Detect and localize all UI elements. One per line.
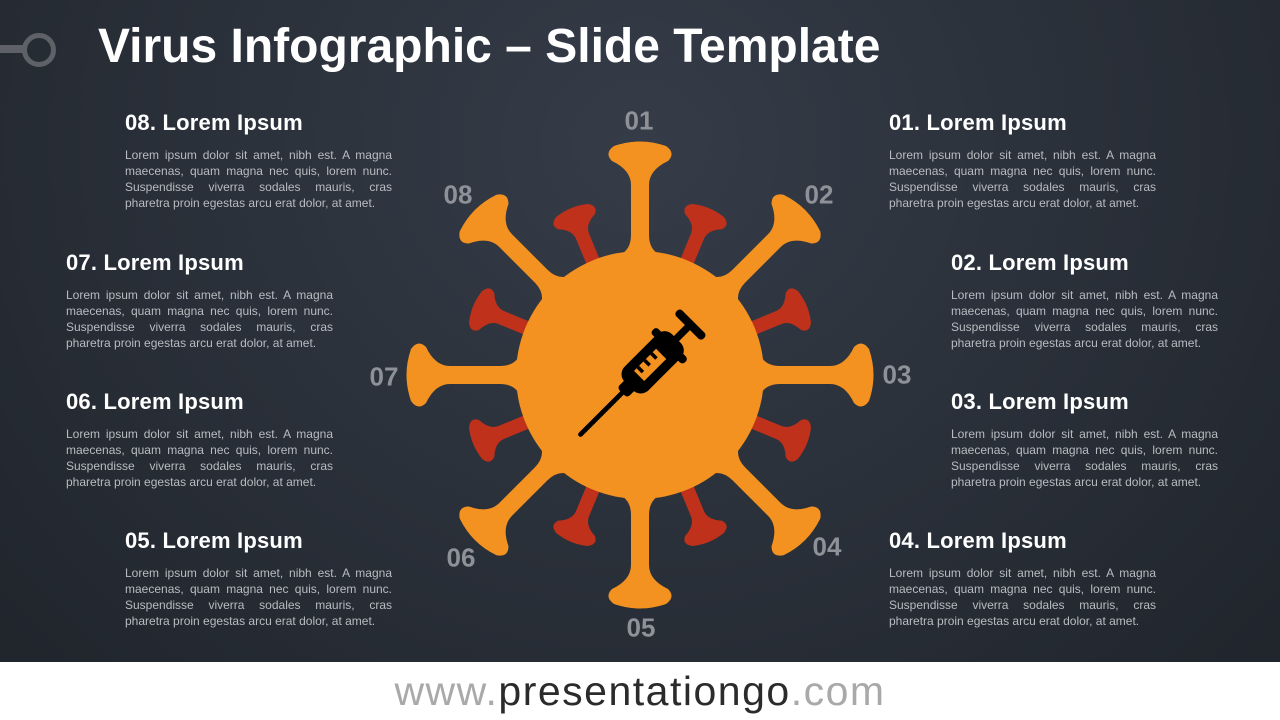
text block 01: 01. Lorem Ipsum [889,110,1067,135]
text block 02 [951,250,1218,350]
text block 06 [66,389,334,489]
text: 06 [447,542,475,572]
text block 05: Lorem ipsum dolor sit amet, nibh est. A magna maecenas, quam magna nec quis, lorem nunc. Suspendisse viverra sodales mauris, cras pharetra proin egestas arcu erat dolor, at amet. [125,566,392,628]
text block 03: 03. Lorem Ipsum [951,389,1129,414]
text block 07: Lorem ipsum dolor sit amet, nibh est. A magna maecenas, quam magna nec quis, lorem nunc. Suspendisse viverra sodales mauris, cras pharetra proin egestas arcu erat dolor, at amet. [66,288,333,350]
text block 08 [125,110,392,210]
text block 06: Lorem ipsum dolor sit amet, nibh est. A magna maecenas, quam magna nec quis, lorem nunc. Suspendisse viverra sodales mauris, cras pharetra proin egestas arcu erat dolor, at amet. [66,427,333,489]
text block 03 [951,389,1218,489]
text block 08: 08. Lorem Ipsum [125,110,303,135]
text: 05 [627,612,655,642]
text: 02 [805,180,833,210]
text block 02: 02. Lorem Ipsum [951,250,1129,275]
text block 04: Lorem ipsum dolor sit amet, nibh est. A magna maecenas, quam magna nec quis, lorem nunc. Suspendisse viverra sodales mauris, cras pharetra proin egestas arcu erat dolor, at amet. [889,566,1156,628]
text block 02: Lorem ipsum dolor sit amet, nibh est. A magna maecenas, quam magna nec quis, lorem nunc. Suspendisse viverra sodales mauris, cras pharetra proin egestas arcu erat dolor, at amet. [951,288,1218,350]
text block 05 [125,528,392,628]
text block 08: Lorem ipsum dolor sit amet, nibh est. A magna maecenas, quam magna nec quis, lorem nunc. Suspendisse viverra sodales mauris, cras pharetra proin egestas arcu erat dolor, at amet. [125,148,392,210]
text: 01 [625,106,653,136]
text block 07: 07. Lorem Ipsum [66,250,244,275]
footer: www.presentationgo.com [394,668,886,714]
text block 04 [889,528,1156,628]
number labels [370,106,911,642]
text: 07 [370,362,398,392]
text block 01: Lorem ipsum dolor sit amet, nibh est. A magna maecenas, quam magna nec quis, lorem nunc. Suspendisse viverra sodales mauris, cras pharetra proin egestas arcu erat dolor, at amet. [889,148,1156,210]
text: 04 [813,532,841,562]
text block 07 [66,250,334,350]
text block 05: 05. Lorem Ipsum [125,528,303,553]
text block 01 [889,110,1156,210]
footer [0,662,1280,720]
text block 04: 04. Lorem Ipsum [889,528,1067,553]
text: 03 [883,360,911,390]
text: 08 [444,180,472,210]
icon: syringe [563,305,710,452]
icon: logo ring [0,33,56,67]
title: Virus Infographic – Slide Template [98,20,880,73]
text block 06: 06. Lorem Ipsum [66,389,244,414]
text block 03: Lorem ipsum dolor sit amet, nibh est. A magna maecenas, quam magna nec quis, lorem nunc. Suspendisse viverra sodales mauris, cras pharetra proin egestas arcu erat dolor, at amet. [951,427,1218,489]
